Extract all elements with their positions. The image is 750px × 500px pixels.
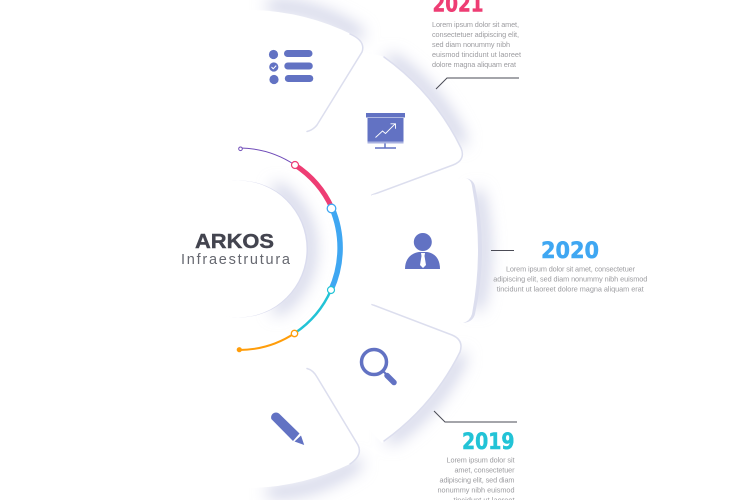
subtitle: Infraestrutura: Infraestrutura: [181, 252, 291, 268]
text block: 2021 description: sed diam nonummy nibh: [432, 40, 510, 49]
panel: 2021 segment: [310, 52, 462, 195]
icon: businessman: [405, 233, 440, 269]
text block: 2019 description: amet, consectetuer: [454, 466, 515, 474]
text block: 2020 description: Lorem ipsum dolor sit amet, consectetuer: [506, 264, 636, 274]
icon: magnifier: [362, 350, 394, 382]
text block: 2021 description: euismod tincidunt ut laoreet: [432, 50, 521, 59]
text block: 2020 description: [493, 264, 647, 294]
text block: 2019 description: adipiscing elit, sed diam: [440, 476, 514, 484]
panel: 2020 segment: [372, 178, 482, 323]
text block: 2020 description: adipiscing elit, sed diam nonummy nibh euismod: [493, 274, 647, 284]
text block: 2021 description: dolore magna aliquam erat: [432, 60, 516, 69]
panel: 2019 segment: [310, 304, 461, 443]
year: 2020: 2020: [541, 239, 599, 264]
text block: 2021 description: [432, 20, 521, 69]
icon: pencil: [271, 412, 304, 445]
year: 2019: 2019: [462, 430, 514, 455]
title: ARKOS: ARKOS: [195, 231, 274, 253]
text block: 2019 description: nonummy nibh euismod: [438, 486, 514, 494]
panel: bottom pencil segment: [240, 368, 359, 488]
center circle: [170, 180, 309, 318]
text block: 2019 description: [438, 456, 515, 500]
leader line: 2020: [491, 250, 514, 252]
leader line: 2019: [434, 411, 517, 422]
leader line: 2021: [436, 78, 519, 89]
text block: 2019 description: Lorem ipsum dolor sit: [446, 456, 514, 464]
panel shadows: [272, 6, 484, 492]
icon: presentation screen: [366, 113, 405, 148]
icon: checklist: [269, 50, 313, 84]
text block: 2021 description: consectetuer adipiscing elit,: [432, 30, 519, 39]
timeline arc: [237, 147, 340, 352]
text block: 2020 description: tincidunt ut laoreet dolore magna aliquam erat: [497, 284, 644, 294]
panel: top checklist segment: [240, 10, 363, 132]
text block: 2021 description: Lorem ipsum dolor sit amet,: [432, 20, 519, 29]
